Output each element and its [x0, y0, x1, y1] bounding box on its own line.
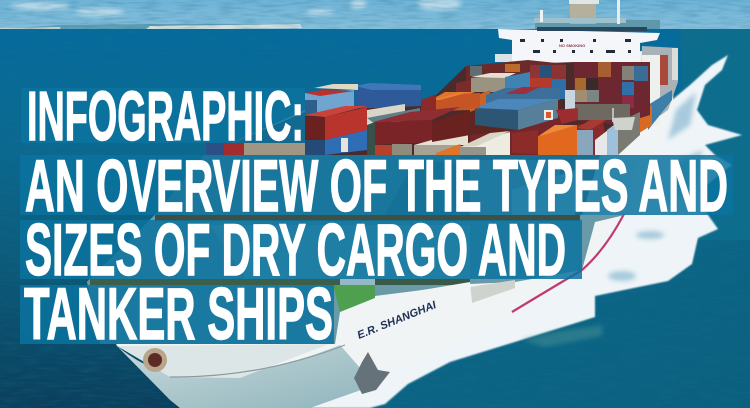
title line 1: INFOGRAPHIC:	[27, 77, 304, 155]
hull stripe	[512, 214, 624, 312]
far-side container stacks	[612, 46, 678, 150]
title band 3	[20, 210, 582, 291]
title line 4: TANKER SHIPS	[24, 274, 333, 355]
superstructure: NO SMOKING	[559, 43, 585, 48]
superstructure	[495, 0, 660, 68]
bow emblem	[143, 348, 167, 372]
aft container stacks	[466, 60, 650, 125]
sky	[0, 0, 750, 29]
title band 2	[20, 146, 733, 227]
foreground containers	[206, 83, 510, 155]
ship name: E.R. SHANGHAI	[356, 299, 439, 342]
wake foam	[300, 55, 742, 408]
title band 4	[20, 274, 334, 355]
deck details	[87, 215, 625, 344]
clouds	[10, 0, 462, 16]
container stack base	[205, 62, 640, 155]
mid containers	[431, 72, 640, 156]
title band 1	[21, 77, 305, 155]
bow underside	[117, 345, 375, 408]
distant coastline	[0, 24, 302, 34]
anchor	[354, 352, 390, 394]
hull	[87, 48, 678, 408]
containers behind title band	[155, 155, 640, 215]
